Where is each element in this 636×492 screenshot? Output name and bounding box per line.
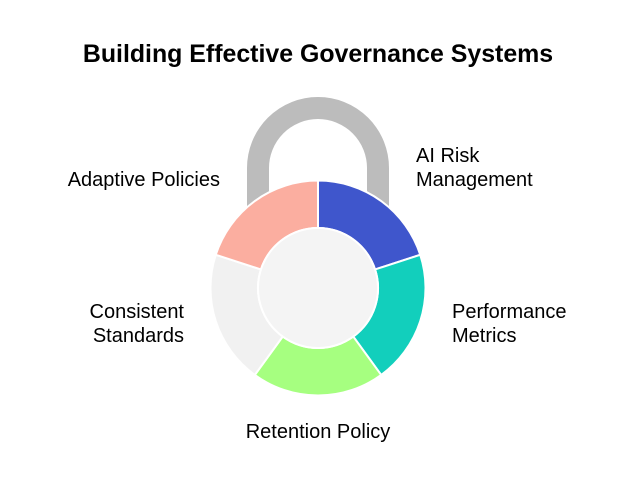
label: AI Risk Management: AI Risk <box>416 145 479 167</box>
title: Building Effective Governance Systems <box>83 40 553 68</box>
segment: Consistent Standards <box>210 255 283 375</box>
segment: Performance Metrics <box>353 255 426 375</box>
label: Performance Metrics: Metrics <box>452 325 516 347</box>
label: Retention Policy: Retention Policy <box>246 421 390 443</box>
center circle <box>258 228 378 348</box>
label: Performance Metrics: Performance <box>452 301 566 323</box>
label: Consistent Standards: Standards <box>93 325 184 347</box>
segment: Retention Policy <box>255 337 381 396</box>
segment: AI Risk Management <box>318 180 420 269</box>
label: Consistent Standards: Consistent <box>90 301 184 323</box>
icon: padlock shackle <box>258 108 378 210</box>
label: Adaptive Policies: Adaptive Policies <box>68 169 220 191</box>
segment: Adaptive Policies <box>216 180 318 269</box>
donut chart: padlock body <box>210 180 426 396</box>
label: AI Risk Management: Management <box>416 169 533 191</box>
